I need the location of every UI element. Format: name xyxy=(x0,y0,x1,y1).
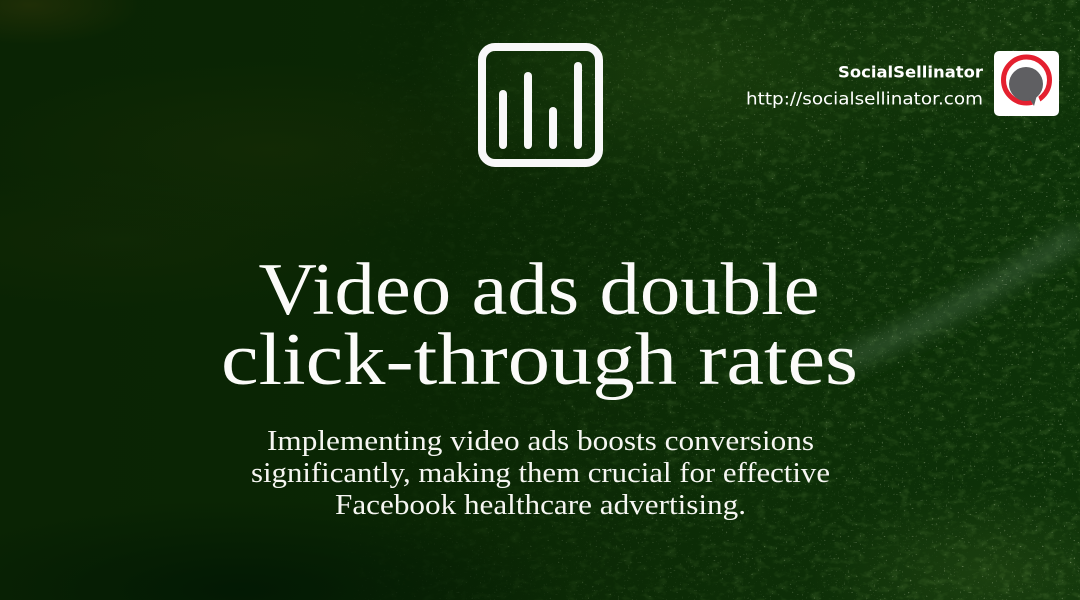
subtitle text: significantly, making them crucial for effective xyxy=(251,458,830,489)
brand name and URL: http://socialsellinator.com xyxy=(746,90,983,110)
logo: SocialSellinator xyxy=(994,51,1059,116)
title: Video ads double xyxy=(258,249,820,331)
subtitle text: Implementing video ads boosts conversions xyxy=(267,426,814,457)
title: click-through rates xyxy=(221,319,858,401)
brand name and URL: SocialSellinator xyxy=(838,62,983,82)
icon: bar chart in rounded square xyxy=(482,47,599,163)
background texture: mottling, leaf vein and speckles xyxy=(372,0,1080,600)
brand name and URL xyxy=(746,62,983,110)
subtitle text: Facebook healthcare advertising. xyxy=(335,490,746,521)
subtitle text xyxy=(251,426,830,521)
title xyxy=(221,249,858,401)
